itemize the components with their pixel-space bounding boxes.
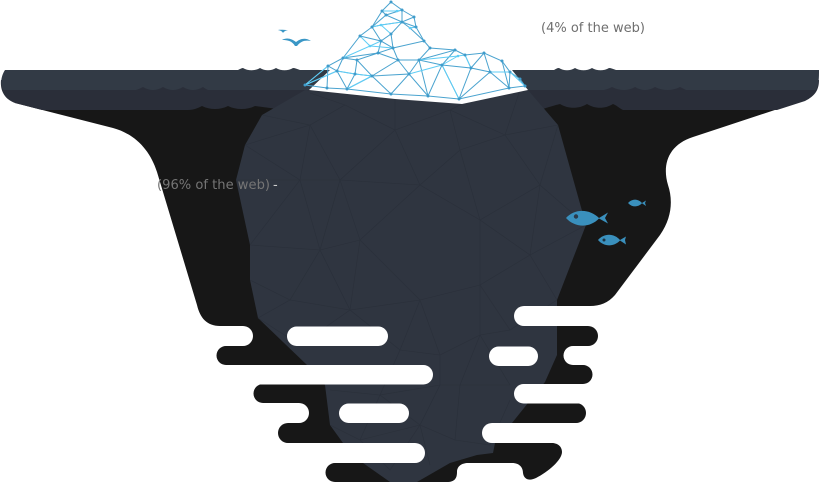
icon: large fish [566, 211, 608, 226]
iceberg underwater mesh [236, 90, 586, 470]
text: deep web label: (96% of the web) [157, 178, 270, 193]
icon: small bird [278, 30, 288, 32]
panel: submerged iceberg [236, 90, 586, 482]
water upper band [1, 68, 819, 90]
panel: white gaps in the silhouette [200, 306, 650, 463]
text: deep web dash: - [273, 178, 278, 193]
icon: large bird [282, 39, 311, 46]
network dark links [305, 2, 525, 99]
text: surface web label: (4% of the web) [541, 21, 645, 36]
network nodes [304, 0, 526, 100]
panel: deep web black silhouette [15, 95, 790, 482]
panel: tip of the iceberg white cutout [309, 70, 528, 104]
icon: small fish [628, 200, 646, 206]
chart: tip of the iceberg network [304, 0, 526, 100]
network light links [305, 10, 525, 99]
icon: medium fish [598, 235, 626, 245]
iceberg underwater body [236, 90, 586, 482]
water lower band [1, 80, 819, 110]
panel: water surface [1, 68, 819, 110]
